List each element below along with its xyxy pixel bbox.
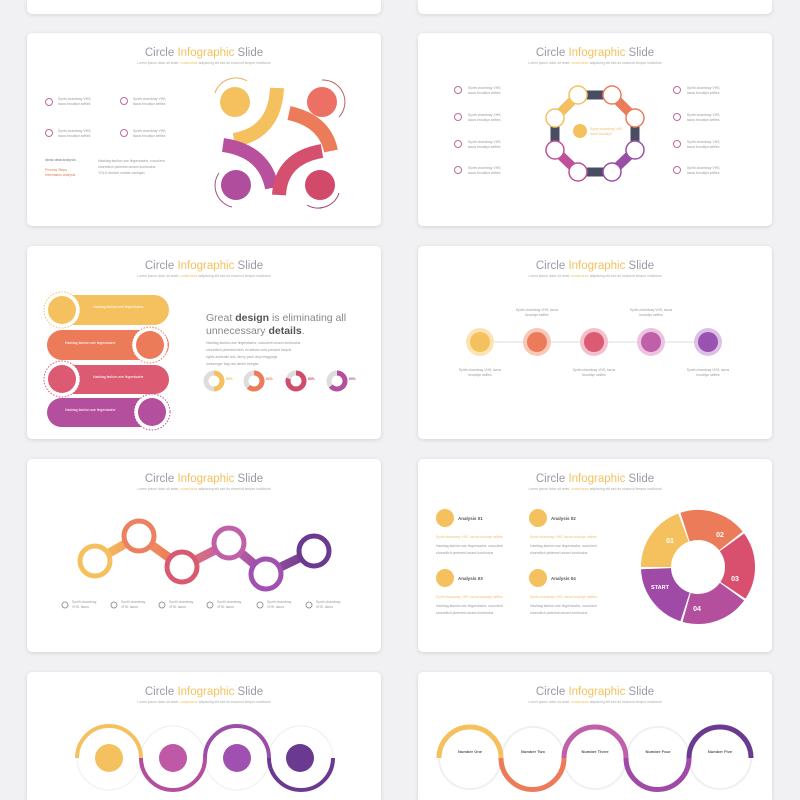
icon list: Synth chambray VHS,: [58, 97, 91, 101]
top partial slide left: [27, 0, 381, 14]
chain labels: VHS, tacos: [121, 605, 138, 609]
chain labels: Synth chambray: [121, 600, 146, 604]
slide 8: numbered wave: [418, 672, 772, 800]
left labels: [454, 86, 501, 175]
wave chart: [77, 726, 333, 790]
analysis items: shoreditch pinterest umami kombucha: [436, 611, 493, 615]
chain labels: VHS, tacos: [72, 605, 89, 609]
chain chart: [80, 521, 329, 589]
ring chart: [546, 86, 644, 181]
right labels: tacos brooklyn selfies: [687, 91, 720, 95]
donut charts: [206, 373, 356, 389]
chain labels: VHS, tacos: [267, 605, 284, 609]
timeline labels: Synth chambray VHS, tacos: [516, 308, 559, 312]
title: [137, 473, 271, 491]
icon list: Synth chambray VHS,: [58, 129, 91, 133]
title: Lorem ipsum dolor sit amet, consectetur adipiscing elit sed do eiusmod tempor incididunt: [528, 61, 662, 65]
right labels: Synth chambray VHS,: [687, 166, 720, 170]
analysis items: Analysis 01: [458, 516, 483, 521]
timeline labels: Synth chambray VHS, tacos: [573, 368, 616, 372]
left labels: tacos brooklyn selfies: [468, 118, 501, 122]
timeline labels: Synth chambray VHS, tacos: [687, 368, 730, 372]
pill bars: Hashtag fashion axe fingerstache: [65, 341, 115, 345]
analysis items: Analysis 02: [551, 516, 576, 521]
swirl ring chart: 02: [716, 532, 724, 539]
timeline labels: Synth chambray VHS, tacos: [630, 308, 673, 312]
swirl ring chart: START: [651, 585, 670, 591]
pill bars: Hashtag fashion axe fingerstache: [65, 408, 115, 412]
analysis items: Analysis 04: [551, 576, 576, 581]
right labels: tacos brooklyn selfies: [687, 171, 720, 175]
title: [528, 47, 662, 65]
slide 7: wave with circles: [27, 672, 381, 800]
notes text: YOLO fashion master cardigan: [98, 171, 145, 175]
timeline circles: [466, 328, 722, 356]
headline text: Hashtag fashion axe fingerstache, succulent umami kombucha: [206, 341, 300, 345]
donut charts: 62%: [266, 377, 273, 381]
analysis items: [436, 509, 597, 615]
chain labels: Synth chambray: [217, 600, 242, 604]
analysis items: shoreditch pinterest umami kombucha: [436, 551, 493, 555]
right labels: [674, 86, 720, 175]
icon list: tacos brooklyn selfies: [133, 134, 166, 138]
headline text: [206, 312, 346, 366]
headline text: unnecessary details.: [206, 325, 305, 337]
pinwheel chart: [215, 78, 345, 208]
analysis items: Analysis 03: [458, 576, 483, 581]
slide 6: analysis and swirl ring: [418, 459, 772, 652]
chain labels: VHS, tacos: [316, 605, 333, 609]
timeline labels: brooklyn selfies: [468, 373, 492, 377]
headline text: shoreditch pinterest banh mi artisan cold-pressed bicycle: [206, 348, 291, 352]
title: Lorem ipsum dolor sit amet, consectetur adipiscing elit sed do eiusmod tempor incididunt: [528, 274, 662, 278]
title: Lorem ipsum dolor sit amet, consectetur adipiscing elit sed do eiusmod tempor incididunt: [137, 274, 271, 278]
notes text: shoreditch pinterest umami kombucha: [98, 165, 155, 169]
slide 2: octagon ring: [418, 33, 772, 226]
wave chart: Number Three: [581, 749, 609, 754]
top partial slide right: [418, 0, 772, 14]
timeline labels: [459, 308, 730, 377]
title: [528, 260, 662, 278]
title: Lorem ipsum dolor sit amet, consectetur adipiscing elit sed do eiusmod tempor incididunt: [137, 61, 271, 65]
swirl ring chart: 04: [693, 606, 701, 613]
wave chart: Number Five: [708, 749, 733, 754]
timeline labels: brooklyn selfies: [582, 373, 606, 377]
title: Circle Infographic Slide: [536, 473, 654, 485]
analysis items: Synth chambray VHS, tacos brooklyn selfies: [530, 595, 597, 599]
left labels: Synth chambray VHS,: [468, 86, 501, 90]
title: [137, 260, 271, 278]
icon list: Synth chambray VHS,: [133, 129, 166, 133]
icon list: [46, 97, 166, 138]
icon list: tacos brooklyn selfies: [58, 102, 91, 106]
icon list: Synth chambray VHS,: [133, 97, 166, 101]
left labels: Synth chambray VHS,: [468, 113, 501, 117]
headline text: rights authentic tofu, fanny pack vinyl meggings: [206, 355, 278, 359]
notes text: Hashtag fashion axe fingerstache, succulent: [98, 159, 165, 163]
title: [137, 47, 271, 65]
chain labels: Synth chambray: [316, 600, 341, 604]
left labels: Synth chambray VHS,: [468, 140, 501, 144]
analysis items: shoreditch pinterest umami kombucha: [530, 611, 587, 615]
donut charts: 65%: [349, 377, 356, 381]
chain labels: VHS, tacos: [217, 605, 234, 609]
swirl ring chart: 03: [731, 576, 739, 583]
wave chart: Number One: [458, 749, 483, 754]
pill bars: Hashtag fashion axe fingerstache: [93, 375, 143, 379]
notes text: Process Steps: [45, 168, 67, 172]
analysis items: Synth chambray VHS, tacos brooklyn selfies: [530, 535, 597, 539]
title: Lorem ipsum dolor sit amet, consectetur adipiscing elit sed do eiusmod tempor incididunt: [528, 700, 662, 704]
headline text: Great design is eliminating all: [206, 312, 346, 324]
analysis items: Hashtag fashion axe fingerstache, succulent: [436, 604, 503, 608]
notes text: Ideas data analysis: [45, 158, 76, 162]
title: [528, 686, 662, 704]
analysis items: shoreditch pinterest umami kombucha: [530, 551, 587, 555]
slide 3: pills and donuts: [27, 246, 381, 439]
title: Circle Infographic Slide: [145, 473, 263, 485]
notes text: Information analysis: [45, 173, 75, 177]
timeline labels: brooklyn selfies: [696, 373, 720, 377]
title: Lorem ipsum dolor sit amet, consectetur adipiscing elit sed do eiusmod tempor incididunt: [528, 487, 662, 491]
donut charts: 80%: [308, 377, 315, 381]
ring chart: Synth chambray VHS: [590, 127, 623, 131]
title: Circle Infographic Slide: [145, 686, 263, 698]
left labels: Synth chambray VHS,: [468, 166, 501, 170]
chain labels: VHS, tacos: [169, 605, 186, 609]
analysis items: Hashtag fashion axe fingerstache, succulent: [530, 544, 597, 548]
swirl ring chart: 01: [666, 538, 674, 545]
donut charts: 50%: [226, 377, 233, 381]
left labels: tacos brooklyn selfies: [468, 91, 501, 95]
right labels: tacos brooklyn selfies: [687, 145, 720, 149]
chain labels: [62, 600, 341, 609]
right labels: tacos brooklyn selfies: [687, 118, 720, 122]
swirl ring chart: [639, 508, 757, 626]
wave chart: Number Four: [645, 749, 671, 754]
right labels: Synth chambray VHS,: [687, 140, 720, 144]
ring chart: tacos brooklyn: [590, 132, 612, 136]
icon list: tacos brooklyn selfies: [58, 134, 91, 138]
title: [137, 686, 271, 704]
right labels: Synth chambray VHS,: [687, 113, 720, 117]
chain labels: Synth chambray: [267, 600, 292, 604]
icon list: tacos brooklyn selfies: [133, 102, 166, 106]
title: Circle Infographic Slide: [536, 47, 654, 59]
analysis items: Synth chambray VHS, tacos brooklyn selfies: [436, 595, 503, 599]
analysis items: Synth chambray VHS, tacos brooklyn selfies: [436, 535, 503, 539]
chain labels: Synth chambray: [72, 600, 97, 604]
left labels: tacos brooklyn selfies: [468, 171, 501, 175]
title: Lorem ipsum dolor sit amet, consectetur adipiscing elit sed do eiusmod tempor incididunt: [137, 487, 271, 491]
timeline labels: brooklyn selfies: [639, 313, 663, 317]
wave chart: [439, 727, 751, 790]
timeline labels: brooklyn selfies: [525, 313, 549, 317]
slide 4: timeline: [418, 246, 772, 439]
chain labels: Synth chambray: [169, 600, 194, 604]
notes text: [45, 158, 165, 177]
title: Lorem ipsum dolor sit amet, consectetur adipiscing elit sed do eiusmod tempor incididunt: [137, 700, 271, 704]
analysis items: Hashtag fashion axe fingerstache, succulent: [530, 604, 597, 608]
title: [528, 473, 662, 491]
pill bars: Hashtag fashion axe fingerstache: [93, 305, 143, 309]
analysis items: Hashtag fashion axe fingerstache, succulent: [436, 544, 503, 548]
title: Circle Infographic Slide: [145, 260, 263, 272]
slide 1: pinwheel circles: [27, 33, 381, 226]
timeline labels: Synth chambray VHS, tacos: [459, 368, 502, 372]
wave chart: Number Two: [521, 749, 546, 754]
right labels: Synth chambray VHS,: [687, 86, 720, 90]
pill bars: [44, 292, 170, 430]
left labels: tacos brooklyn selfies: [468, 145, 501, 149]
headline text: messenger bag raw denim freegan: [206, 362, 259, 366]
title: Circle Infographic Slide: [536, 686, 654, 698]
slide 5: zigzag chain: [27, 459, 381, 652]
title: Circle Infographic Slide: [536, 260, 654, 272]
title: Circle Infographic Slide: [145, 47, 263, 59]
